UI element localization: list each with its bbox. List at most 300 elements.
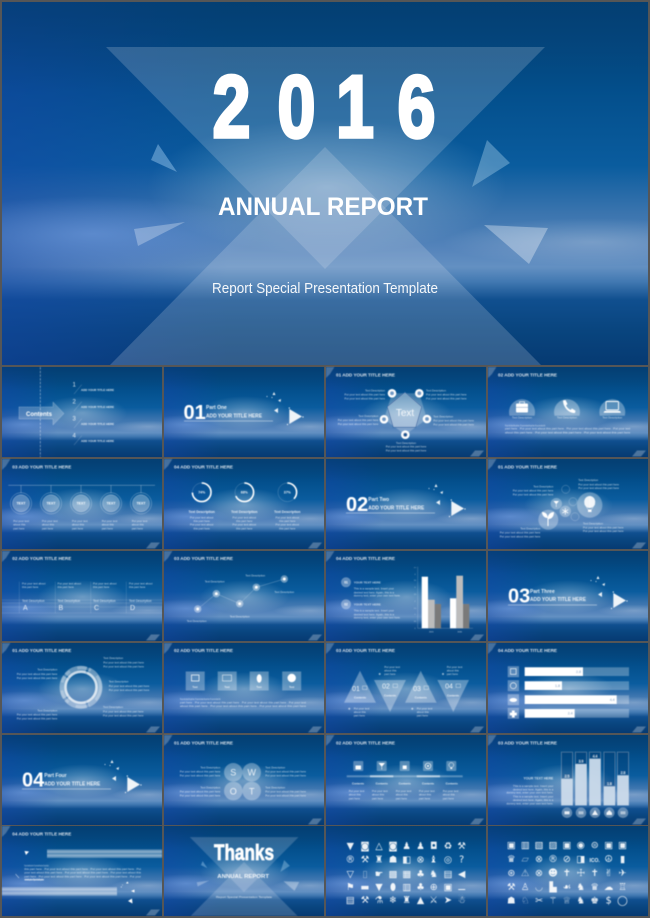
icon grid: ⚒ (361, 854, 370, 866)
column captions: Put your text about (93, 581, 117, 585)
paragraph: your text about this part here . Put your text about this part here . Put your text about this (24, 871, 142, 875)
icon grid: ▙ (548, 881, 557, 893)
icon grid: ♣ (416, 882, 425, 893)
title: 03 ADD YOUR TITLE HERE (498, 740, 557, 746)
part decoration (22, 760, 142, 793)
gauge values: 2.8 (621, 771, 625, 775)
icon grid: ☛ (375, 869, 383, 880)
template line: Report Special Presentation Template (216, 895, 272, 899)
icon grid: ▱ (522, 854, 530, 865)
icon grid (346, 841, 466, 906)
icon grid: ♞ (577, 896, 585, 906)
title: 01 ADD YOUR TITLE HERE (12, 648, 71, 653)
column lines (2, 582, 162, 613)
column letters: A (23, 605, 28, 612)
right text: Text Description (265, 766, 285, 770)
chart: 2015 (429, 631, 434, 633)
triangle numbers: 03 (413, 686, 421, 693)
slide 20: column gauges (468, 735, 650, 825)
icon grid: ▣ (618, 840, 627, 851)
slide 3: pentagon (306, 367, 509, 457)
node labels: Text Description (205, 579, 225, 583)
captions: Put your text (443, 789, 459, 793)
title: 2016: 2 (213, 58, 250, 156)
icon grid: ◎ (444, 854, 452, 866)
contents labels: Contents (384, 694, 397, 698)
icon grid: ▣ (562, 840, 571, 851)
captions: part here (384, 672, 396, 676)
text blocks: Put your text about this part here (513, 493, 554, 497)
bar values: 2.8 (576, 670, 581, 674)
icon grid: ❄ (389, 895, 397, 906)
slide 8: bubbles: Text Description (583, 521, 603, 525)
slide 10: network line (144, 551, 347, 641)
subtitle: Report Special Presentation Template (212, 281, 438, 297)
connecting line (198, 579, 284, 609)
title: 04 ADD YOUR TITLE HERE (12, 832, 71, 837)
paragraph: Put your text about this part here . Put your text about this part here. Put your text about (24, 863, 133, 867)
icon grid: ◙ (388, 841, 398, 852)
title: 02 ADD YOUR TITLE HERE (174, 648, 233, 653)
captions: part here (417, 714, 428, 718)
ring values: 37% (284, 491, 292, 495)
node labels: Text Description (230, 615, 250, 619)
paragraph: Put your text about this part here . Put your text about this part here. Put your text about this (505, 423, 619, 427)
ring charts (192, 483, 297, 502)
text block: desired text here. Again, this is a (513, 798, 554, 802)
chart (414, 567, 473, 633)
dashed vertical line (39, 367, 41, 457)
column headings: Text Description (129, 599, 152, 603)
icon grid: ▽ (347, 869, 355, 880)
captions: Put your text (42, 519, 58, 523)
slide 5: five hanging circles (0, 459, 185, 549)
icon grid: ✈ (619, 868, 627, 879)
title: 2016: 0 (278, 58, 315, 156)
slide 13: segmented ring: Put your text about this part here (109, 684, 150, 688)
pentagon diagram (380, 389, 431, 439)
gauge values: 3.9 (579, 760, 583, 764)
paragraph: this part here . Put your text about this part here . Put your text about this part here . Put (24, 867, 141, 871)
top band (47, 849, 162, 858)
captions: part here (13, 526, 25, 530)
column captions: this part here (129, 585, 146, 589)
captions: Put your text (13, 519, 29, 523)
captions: part here (354, 714, 365, 718)
icon grid: ▣ (604, 840, 613, 851)
part decoration (508, 576, 628, 609)
captions: about this (13, 523, 26, 527)
icon grid: ✌ (605, 868, 613, 879)
icon grid: ? (459, 854, 464, 866)
cube labels: Text (256, 685, 262, 689)
ring captions: this part here (236, 519, 253, 523)
slide 3: pentagon: Put your text about this part here (338, 418, 379, 422)
triangles (344, 671, 469, 712)
icon grid: ▼ (347, 841, 355, 852)
slide 3: pentagon: Put your text about this part here (426, 396, 467, 400)
icon grid: ▼ (375, 882, 383, 893)
title: 03 ADD YOUR TITLE HERE (336, 648, 395, 653)
triangle numbers: 04 (445, 684, 453, 690)
captions: part here (447, 672, 458, 676)
icon grid: ♝ (429, 854, 438, 866)
circle labels: TEXT (47, 502, 56, 506)
dome labels: Text Description (557, 415, 577, 419)
captions: Put your text (354, 707, 370, 711)
slide 23: icon sheet one (306, 826, 509, 916)
cube labels: Text (289, 685, 294, 689)
icon grid: ⊕ (430, 882, 438, 893)
icon grid: ◨ (576, 854, 585, 865)
left text: Text Description (200, 766, 220, 770)
chart: 1 (415, 614, 416, 616)
icon grid: ◧ (402, 854, 411, 866)
icon grid: ▣ (444, 882, 453, 893)
captions: part here (372, 796, 384, 800)
bottom band (2, 887, 117, 896)
chart: 2.5 (414, 594, 416, 596)
icon grid: ◘ (430, 841, 437, 852)
slide 14: icon cubes (144, 643, 347, 733)
chart: 4.5 (414, 567, 416, 569)
title: 2016 (213, 58, 435, 156)
slide 12: part three (468, 551, 650, 641)
slide 13: segmented ring: Text Description (37, 668, 57, 672)
part number: 01 (184, 402, 206, 424)
icon grid: ▯ (362, 869, 368, 880)
ring captions: Put your text about (233, 515, 256, 519)
icon grid: ▨ (549, 840, 558, 851)
slide 13: segmented ring: Put your text about this part here (17, 717, 58, 721)
chart: 2016 (457, 631, 463, 633)
captions: part here (132, 526, 143, 530)
captions: about this (354, 710, 366, 714)
ring values: 68% (241, 491, 249, 495)
icon grid: △ (375, 841, 383, 852)
icon grid: ⊗ (417, 854, 424, 866)
ring captions: Put your text about (233, 523, 256, 527)
part heading: ADD YOUR TITLE HERE (206, 414, 263, 420)
part number: 03 (508, 586, 530, 608)
icon grid: ✝ (591, 868, 599, 879)
chart: 2 (415, 601, 416, 603)
gauge icons (562, 807, 628, 818)
text blocks: Put your text about this part here (513, 489, 554, 493)
captions: about this (417, 710, 429, 714)
circles (10, 493, 152, 514)
slide 13: segmented ring: Put your text about this part here (17, 713, 58, 717)
title: 03 ADD YOUR TITLE HERE (174, 556, 233, 561)
dots (348, 673, 444, 710)
slide 3: pentagon: Put your text about this part here (386, 448, 427, 452)
slide 1: contents (0, 367, 185, 457)
captions: about this (349, 793, 361, 797)
captions: about this (102, 523, 114, 527)
bar values: 2.4 (568, 712, 573, 716)
icon grid: ☁ (604, 882, 614, 893)
hanging line (8, 485, 155, 493)
left text: Put your text about this part here (180, 773, 221, 777)
text block two: dummy text, enter your own text here. (354, 616, 401, 620)
icon grid: ♚ (590, 896, 599, 906)
captions: about this (42, 523, 55, 527)
icon grid: ♛ (507, 854, 516, 865)
ring captions: this part here (194, 526, 210, 530)
contents list: 3 (72, 416, 76, 422)
icon squares (353, 761, 456, 771)
part heading: Part One (206, 405, 227, 411)
captions: about this (372, 793, 385, 797)
text block one: dummy text, enter your own text here. (354, 594, 401, 598)
slide 3: pentagon: Put your text about this part here (338, 422, 379, 426)
text block: This is a sample text. Insert your (513, 784, 553, 788)
slide 3: pentagon: Text Description (426, 389, 446, 393)
icon grid: $ (606, 896, 612, 906)
slide 8: bubbles: Text Description (578, 478, 598, 482)
contents labels: Contents (352, 782, 364, 786)
icon grid: ◙ (360, 841, 370, 852)
icon grid: ◯ (617, 896, 628, 906)
icon grid: ▤ (346, 895, 355, 906)
captions: part here (72, 526, 84, 530)
slide 8: bubbles: Text Description (520, 527, 540, 531)
contents labels: Contents (447, 694, 460, 698)
icon grid: ® (346, 854, 355, 866)
slide 15: alternating triangles (306, 643, 509, 733)
icon grid: ⊛ (507, 868, 515, 879)
SWOT letters: O (230, 786, 237, 796)
slide 13: segmented ring: Put your text about this part here (17, 676, 58, 680)
icon grid: ⚚ (549, 896, 557, 906)
icon grid: ♣ (416, 869, 425, 880)
slide 13: segmented ring: Text Description (37, 708, 57, 712)
captions: part here (42, 526, 54, 530)
chart: 3.5 (414, 580, 416, 582)
slide 17: part four (0, 735, 185, 825)
icon grid: ✂ (535, 896, 543, 906)
ring captions: this part here (236, 526, 253, 530)
contents list: 2 (72, 400, 76, 406)
part heading: ADD YOUR TITLE HERE (530, 597, 587, 603)
domes with icons (509, 399, 625, 416)
ring values: 74% (198, 491, 205, 495)
circle labels: TEXT (137, 502, 146, 506)
slide 13: segmented ring: Put your text about this part here (109, 688, 150, 692)
icon grid: ♙ (521, 882, 529, 893)
icon grid: ▤ (444, 869, 453, 880)
icon grid: ✝ (563, 868, 571, 879)
slide 21: striped bands (0, 826, 185, 916)
icon squares (508, 666, 519, 719)
captions: about this (419, 793, 432, 797)
ring headings: Text Description (274, 510, 300, 514)
bar values: 4.4 (610, 698, 615, 702)
contents labels: Contents (422, 782, 435, 786)
captions: Put your text (384, 665, 400, 669)
numbered badges: 01 (344, 580, 348, 584)
SWOT letters: T (249, 786, 255, 796)
icon grid: ☗ (389, 854, 397, 866)
icon grid: ♟ (402, 841, 411, 852)
column headings: Text Description (93, 599, 116, 603)
contents list: ADD YOUR TITLE HERE (81, 439, 114, 443)
icon grid: ☮ (604, 854, 613, 865)
slide 19: five icon timeline (306, 735, 509, 825)
chart: 1.5 (414, 608, 416, 610)
contents labels: Contents (399, 782, 411, 786)
left text: Put your text about this part here (180, 793, 221, 797)
icon grid: ⊜ (591, 840, 599, 851)
bar tracks (525, 667, 629, 718)
cube labels: Text (224, 685, 230, 689)
ring headings: Text Description (231, 510, 257, 514)
left text: Text Description (200, 785, 221, 789)
icon grid: ♜ (402, 895, 411, 906)
text block: This is a sample text. Insert your (513, 794, 553, 798)
text block two: YOUR TEXT HERE (354, 602, 381, 606)
icon grid: ☙ (563, 882, 571, 893)
panel: hero cover slide (0, 2, 650, 365)
slide 7: part two (306, 459, 509, 549)
title: 2016: 1 (336, 58, 374, 156)
text block: dummy text, enter your own text here. (506, 791, 554, 795)
icon grid: ♘ (521, 896, 529, 906)
part heading: Part Four (44, 773, 67, 779)
paragraph: part here . Put your text about this part here . Put your text about this part here . Put your (24, 874, 141, 878)
SWOT letters: W (247, 768, 256, 778)
left text: Put your text about this part here (180, 790, 221, 794)
chart: 0 (415, 628, 416, 630)
captions: Put your text (132, 519, 148, 523)
icon grid: ⚊ (457, 882, 466, 893)
paragraph: about this part here . Put your text about this part here . Put your text about this part here (180, 704, 307, 708)
slide 13: segmented ring: Put your text about this part here (17, 672, 58, 676)
text block: dummy text, enter your own text here. (506, 802, 554, 806)
dome labels: Text Description (512, 415, 532, 419)
cube labels: Text (192, 686, 198, 689)
ring headings: Text Description (189, 510, 215, 514)
icon grid: ♟ (416, 841, 425, 852)
node labels: Text Description (187, 619, 207, 623)
chart: 0.5 (414, 621, 416, 623)
left text: Put your text about this part here (180, 770, 221, 774)
triangle icons (362, 684, 460, 690)
slide 8: bubbles: Put your text about this part here (583, 529, 624, 533)
icon grid: ♕ (563, 896, 571, 906)
captions: about this (443, 793, 455, 797)
text blocks: Text Description (103, 656, 123, 660)
slide 3: pentagon: Put your text about this part here (433, 423, 474, 427)
icon grid: ⊗ (535, 854, 543, 865)
column letters: B (58, 605, 64, 612)
ring captions: Put your text about (190, 515, 213, 519)
part heading: Part Two (368, 497, 389, 503)
contents list: ADD YOUR TITLE HERE (81, 405, 114, 409)
icon grid: ☗ (507, 896, 516, 906)
slide 8: bubbles: Put your text about this part here (578, 482, 619, 486)
icon grid: ♖ (618, 882, 627, 893)
slide 8: bubbles: Put your text about this part here (500, 535, 541, 539)
contents labels: Contents (415, 696, 427, 700)
title: 02 ADD YOUR TITLE HERE (498, 373, 557, 378)
slide 13: segmented ring: Put your text about this part here (103, 713, 144, 717)
thanks heading: Thanks (214, 840, 274, 865)
column captions: Put your text about (58, 581, 81, 585)
right text: Put your text about this part here (265, 770, 306, 774)
slide 13: segmented ring: Text Description (103, 705, 123, 709)
chart: 4 (415, 574, 416, 576)
slide 3: pentagon: Text Description (358, 414, 378, 418)
text blocks: Put your text about this part here (103, 660, 144, 664)
captions: Put your text (72, 519, 88, 523)
column headings: Text Description (58, 599, 80, 603)
captions: Put your text (102, 519, 118, 523)
triangle numbers: 02 (382, 684, 390, 690)
title: 04 ADD YOUR TITLE HERE (336, 556, 395, 561)
icon grid: ▦ (402, 869, 411, 880)
slide 16: horizontal bars (468, 643, 650, 733)
icon grid: ⚑ (346, 882, 355, 893)
icon grid: ▥ (402, 882, 411, 893)
gauge fills (561, 759, 629, 805)
slide 3: pentagon: Put your text about this part here (386, 445, 427, 449)
nodes (194, 575, 288, 613)
icon grid (507, 840, 628, 906)
icon grid: ☃ (457, 894, 466, 906)
column headings: Text Description (22, 599, 45, 603)
slide 8: bubbles (468, 459, 650, 549)
text block one: desired text here. Again, this is a (354, 590, 395, 594)
slide 8: bubbles: Put your text about this part here (583, 525, 624, 529)
text blocks: Text Description (365, 389, 385, 393)
icon grid: ⚔ (429, 895, 438, 906)
text block one: This is a sample text. Insert your (354, 587, 394, 591)
captions: part here (349, 796, 360, 800)
column captions: this part here (93, 585, 110, 589)
column captions: Put your text about (22, 581, 45, 585)
icon grid: ⊗ (535, 868, 543, 879)
timeline bar (347, 775, 463, 777)
contents label: Contents (26, 412, 53, 418)
icon grid: ♞ (577, 882, 585, 893)
icon grid: ▬ (361, 882, 370, 893)
title: 01 ADD YOUR TITLE HERE (498, 465, 557, 470)
icon grid: ♜ (375, 854, 383, 866)
text blocks: Put your text about this part here (344, 396, 385, 400)
captions: about this (396, 793, 408, 797)
title: 2016: 6 (398, 58, 435, 156)
captions: part here (443, 796, 454, 800)
text block: desired text here. Again, this is a (513, 787, 554, 791)
circle labels: TEXT (77, 502, 86, 506)
captions: Put your text (372, 789, 388, 793)
heading: annual report: ANNUAL REPORT (218, 193, 428, 221)
ring captions: this part here (194, 519, 210, 523)
column captions: this part here (22, 585, 39, 589)
part heading: Part Three (530, 589, 555, 595)
icon grid: ▮ (620, 854, 625, 865)
icon grid: ⚗ (375, 895, 383, 906)
slide 18: SWOT (144, 735, 347, 825)
captions: about this (72, 523, 85, 527)
part decoration (346, 484, 466, 517)
text block two: desired text here. Again, this is a (354, 612, 395, 616)
slide 24: icon sheet two (468, 826, 650, 916)
node labels: Text Description (245, 573, 266, 577)
SWOT circles (224, 763, 261, 800)
icon grid: ◉ (577, 840, 585, 851)
